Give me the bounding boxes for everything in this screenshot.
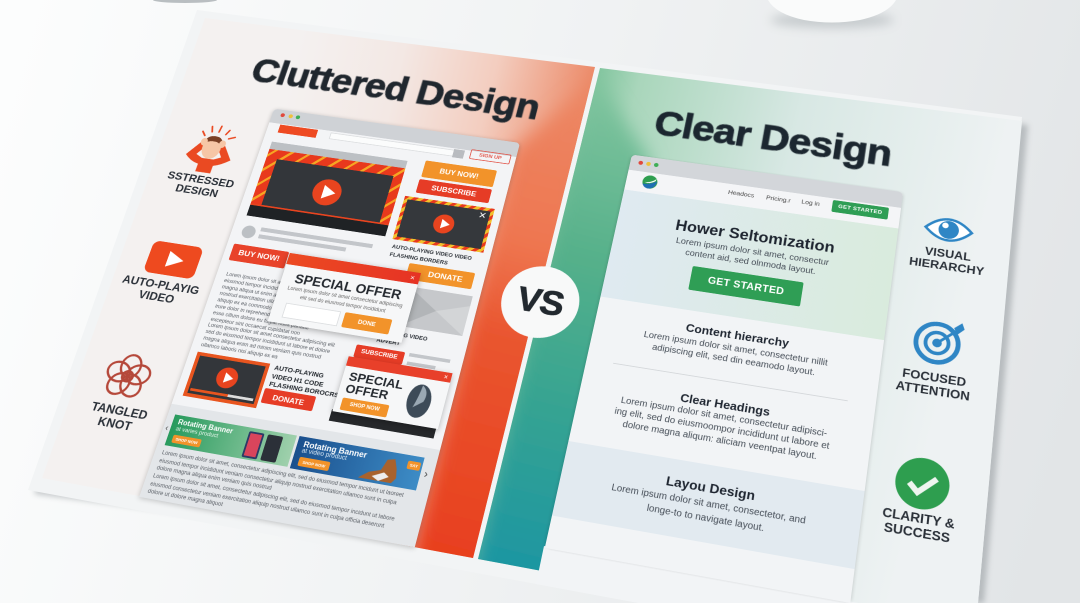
buy now red button: BUY NOW!: [237, 249, 281, 264]
placeholder line short: [406, 361, 436, 369]
green banner button: [171, 435, 202, 447]
hero section: [600, 189, 898, 340]
placeholder line: [409, 353, 451, 363]
blue banner subheading: at video product: [301, 448, 348, 462]
nav link: Headocs: [727, 188, 755, 199]
third video frame: [183, 352, 270, 408]
lorem column one: Lorem ipsum dolor sit amet, consectetur adip: [225, 271, 332, 293]
mouse product: [406, 384, 432, 418]
lorem column two: sed do eiusmod tempor incididunt ut labore et dolore: [205, 329, 331, 355]
label: clarity and success: SUCCESS: [883, 519, 951, 545]
carousel arrow right: ›: [423, 467, 430, 481]
placeholder line one: [260, 227, 373, 248]
shoe product: [358, 459, 397, 484]
phones: [242, 431, 284, 463]
popup done button: [341, 312, 392, 335]
popup heading: SPECIAL OFFER: [293, 272, 403, 303]
cup on the desk: [768, 0, 896, 28]
blue banner heading: Rotating Banner: [302, 440, 368, 460]
lorem column two: magna aliqua enim ad minim veniam quis nostrud: [202, 335, 322, 360]
carousel arrow left: ‹: [164, 423, 170, 433]
left panel saturated strip: [409, 78, 592, 558]
label: stressed design: DESIGN: [174, 182, 220, 199]
third video caption: VIDEO H1 CODE: [271, 372, 325, 388]
clear headings text: Lorem ipsum dolor sit amet, consectetur adipisci-: [620, 396, 828, 439]
hero text: content aid, sed olnmoda layout.: [684, 248, 816, 277]
object at top-left edge: [153, 0, 217, 3]
layout design text: Lorem ipsum dolor sit amet, consectetor, and: [610, 483, 806, 526]
icon: check: [895, 458, 950, 510]
label: visual hierarchy: VISUAL: [924, 245, 972, 263]
rotating video caption: ADVERT: [376, 337, 401, 347]
lorem column one: irure dolor in reprehenderit in voluptate velit: [214, 303, 318, 326]
subscribe red button: [416, 179, 492, 203]
vs badge: VS: [513, 280, 567, 324]
banner: blue: [290, 436, 425, 491]
subscribe small button: [353, 344, 405, 365]
nav link: Pricing.r: [766, 194, 791, 204]
browser title bar: [629, 155, 903, 208]
label: tangled knot: TANGLED: [89, 400, 150, 422]
content hierarchy text: [526, 176, 982, 522]
lorem column two: Lorem ipsum dolor sit amet consectetur adipiscing elit: [207, 322, 336, 349]
lorem column one: aliquip ex ea commodo consequat duis aute: [216, 297, 321, 319]
lorem column two: [200, 322, 336, 360]
small popup heading: SPECIAL: [347, 369, 405, 392]
search bar: [329, 132, 462, 158]
right panel fade: [478, 68, 1022, 603]
avatar: [240, 225, 257, 239]
content hierarchy heading: Content hierarchy: [685, 321, 790, 350]
sign up button: [469, 149, 512, 165]
small video play button: [433, 214, 454, 234]
content hierarchy text: Lorem ipsum dolor sit amet, consectetur nillit: [643, 330, 828, 368]
subscribe red button: SUBSCRIBE: [430, 184, 477, 198]
third video caption: FLASHING BOROCRS!!: [268, 380, 344, 400]
small video screen: [397, 199, 491, 249]
title: clear design: Clear Design: [651, 103, 894, 174]
small popup heading: OFFER: [344, 381, 390, 402]
section divider: [613, 363, 848, 401]
donate red button: [261, 388, 316, 411]
third video progress: [190, 388, 253, 401]
buy now orange button: BUY NOW!: [439, 167, 480, 180]
popup close: ×: [409, 273, 416, 282]
lorem column one: esse cillum dolore eu fugiat nulla pariatur: [212, 310, 310, 331]
main video screen: [261, 159, 394, 222]
lorem column one: excepteur sint occaecat cupidatat non: [210, 316, 301, 337]
banner lorem two: dolore ut dolore magna aliquot: [147, 488, 224, 508]
label: clarity and success: [882, 505, 955, 545]
label: tangled knot: [89, 400, 150, 433]
red logo: [278, 125, 318, 138]
label: stressed design: [166, 169, 236, 199]
clear headings text: ing elit, sed do eiusmoompor incididunt ut labore et: [614, 406, 830, 452]
small video caption: FLASHING BORDERS: [389, 252, 448, 266]
label: auto-playing video: VIDEO: [137, 288, 176, 305]
gray image placeholder: [406, 288, 473, 336]
layout design text: [526, 176, 982, 534]
gray banner section: [139, 404, 440, 547]
lorem column two: ullamco laboris nisi aliquip ex ea: [200, 342, 278, 360]
browser: clear: [545, 155, 903, 603]
browser: cluttered: [139, 109, 520, 547]
sale tag: [406, 461, 421, 471]
nav button: [831, 200, 889, 220]
lorem column one: nostrud exercitation ullamco laboris nisi ut: [219, 291, 318, 312]
donate red button: DONATE: [272, 393, 305, 407]
label: focused attention: FOCUSED: [902, 366, 967, 389]
banner: green: [165, 414, 297, 467]
clear headings heading: Clear Headings: [679, 391, 771, 419]
banner lorem one: dolore magna aliqua enim veniam quis nostrud: [156, 465, 272, 492]
left panel gradient: [42, 18, 595, 558]
donate orange button: DONATE: [427, 270, 464, 284]
logo: [642, 175, 658, 189]
nav link: Log in: [801, 198, 820, 208]
small video frame: [392, 196, 495, 253]
main video play button: [312, 179, 342, 206]
label: tangled knot: KNOT: [96, 414, 134, 433]
main video flashing frame: [250, 149, 405, 225]
third video screen: [187, 356, 266, 404]
label: stressed design: SSTRESSED: [166, 169, 236, 190]
green banner subheading: at varies product: [175, 426, 219, 439]
label: visual hierarchy: HIERARCHY: [908, 254, 985, 278]
green banner heading: Rotating Banner: [177, 418, 234, 435]
clear headings text: dolore magna aliqum: aliciam veentpat layout.: [622, 420, 818, 462]
donate orange button: [405, 263, 475, 289]
third video play button: [216, 367, 238, 388]
popup body: Lorem ipsum dolor sit amet consectetur adipiscing: [287, 286, 403, 309]
green banner button: SHOP NOW: [175, 437, 198, 445]
label: clarity and success: CLARITY &: [882, 505, 955, 532]
icon: video play: [144, 241, 202, 279]
popup header: [286, 253, 421, 284]
icon: eye: [924, 218, 974, 242]
third video caption: AUTO-PLAYING: [273, 364, 325, 380]
browser title bar: [269, 109, 520, 157]
popup body: elit sed do eiusmod tempor incididunt: [299, 296, 386, 314]
right panel green strip: [468, 68, 650, 600]
search button: [452, 149, 465, 159]
main video controls: [247, 203, 389, 236]
title: cluttered design: Cluttered Design: [246, 51, 544, 127]
sale tag: SAY: [409, 463, 419, 469]
lorem column one: eiusmod tempor incididunt ut labore et dolore: [223, 278, 330, 300]
sign up button: SIGN UP: [478, 153, 502, 161]
blue banner button: [297, 457, 331, 471]
window dots: [280, 113, 300, 120]
banner lorem two: eiusmod consectetur veniam exercitation aliquip nostrud ullamco sunt in culpa officia deserunt: [149, 480, 385, 529]
lower continuation of clear browser: [536, 546, 858, 603]
nav button: GET STARTED: [838, 204, 883, 216]
popup done button: DONE: [357, 319, 376, 328]
blue banner button: SHOP NOW: [302, 460, 326, 468]
lorem column one: magna aliqua ut enim ad minim veniam quis: [221, 284, 325, 306]
rotating video caption: ROTATING VIDEO: [378, 329, 428, 342]
icon: target: [913, 322, 965, 365]
third video caption: [268, 364, 344, 400]
placeholder line two: [258, 234, 346, 252]
popup: special offer small: [332, 356, 453, 429]
small popup button: SHOP NOW: [349, 402, 380, 413]
video top bar: [269, 142, 408, 168]
hero heading: Hower Seltomization: [674, 217, 836, 256]
popup input: [281, 303, 341, 326]
small popup heading: [344, 369, 405, 402]
small video caption: AUTO-PLAYING VIDEO VIDEO: [391, 244, 472, 262]
icon: tangled knot: [106, 354, 152, 398]
vs badge: [493, 261, 587, 344]
window dots: [638, 160, 659, 168]
small popup button: [339, 397, 389, 418]
dark video bar: [329, 409, 437, 439]
small popup header: [346, 356, 453, 383]
banner lorem one: eiusmod tempor incididunt veniam consectetur aliquip nostrud exercitation ullamco sunt in culpa: [158, 457, 398, 506]
small video close: ✕: [477, 211, 488, 221]
label: auto-playing video: AUTO-PLAYIG: [121, 273, 201, 297]
layout design text: longe-to to navigate layout.: [646, 503, 765, 534]
clear headings text: [526, 176, 982, 522]
layout design section: [552, 441, 865, 569]
popup: special offer: [268, 253, 421, 343]
label: focused attention: [895, 366, 970, 403]
hero button: GET STARTED: [707, 275, 785, 297]
subscribe small button: SUBSCRIBE: [360, 349, 398, 361]
nav bar: [624, 170, 901, 228]
buy now orange button: [421, 160, 497, 187]
layout design heading: Layou Design: [665, 473, 756, 503]
small popup close: ×: [443, 373, 449, 381]
buy now red button: [229, 244, 289, 269]
banner lorem one: Lorem ipsum dolor sit amet, consectetur adipiscing elit, sed do eiusmod tempor incidunt ut laoreet: [161, 450, 404, 499]
lorem column one: [210, 271, 332, 337]
label: focused attention: ATTENTION: [895, 378, 970, 403]
banner lorem two: Lorem ipsum dolor sit amet, consectetur adipiscing elit, sed do eiusmod tempor incidunt ut labore: [152, 473, 395, 523]
hero button: [688, 266, 804, 307]
content hierarchy text: adipiscing elit, sed din eeamodo layout.: [651, 343, 816, 378]
hero text: Lorem ipsum dolor sit amet, consectur: [675, 236, 830, 268]
icon: stressed person: [186, 125, 236, 174]
